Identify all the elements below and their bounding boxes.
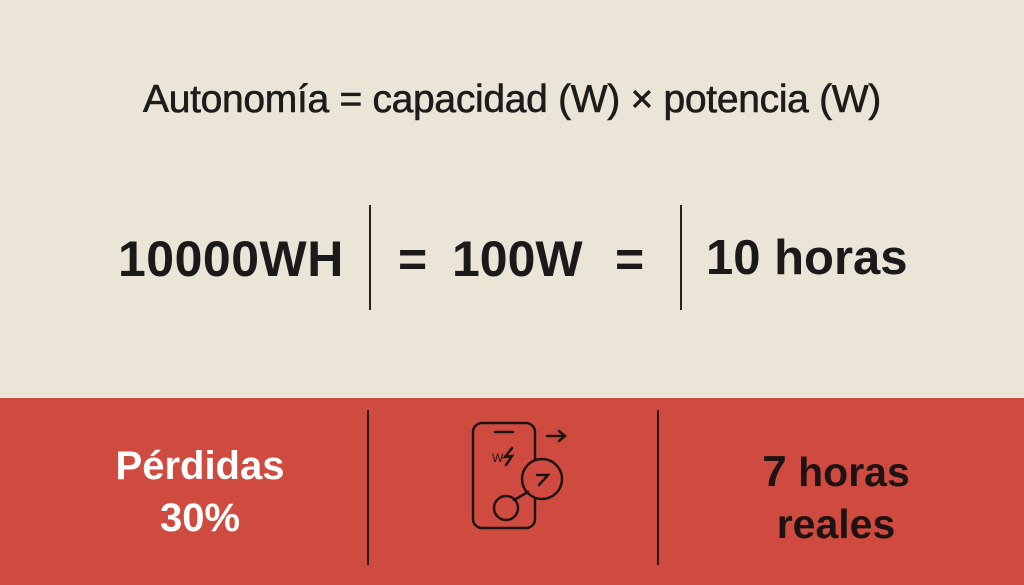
value: power: = — [398, 231, 427, 287]
result text: reales — [777, 501, 895, 547]
title formula: Autonomía = capacidad (W) × potencia (W) — [143, 78, 881, 121]
losses text: Pérdidas — [116, 444, 284, 488]
result text: 7 horas — [762, 447, 910, 496]
divider — [367, 410, 369, 565]
value: capacity: 10000WH — [118, 231, 344, 287]
divider — [680, 205, 682, 310]
divider — [369, 205, 371, 310]
losses text — [116, 444, 284, 540]
icon: phone with power: W — [492, 451, 504, 465]
red band panel — [0, 398, 1024, 585]
equation row: 100W — [452, 231, 583, 287]
value: result: 10 horas — [706, 231, 908, 285]
losses text: 30% — [160, 496, 240, 540]
icon: phone with power — [472, 422, 567, 530]
result text — [762, 447, 910, 547]
equation row: = — [615, 231, 644, 287]
divider — [657, 410, 659, 565]
equation row — [118, 205, 908, 310]
